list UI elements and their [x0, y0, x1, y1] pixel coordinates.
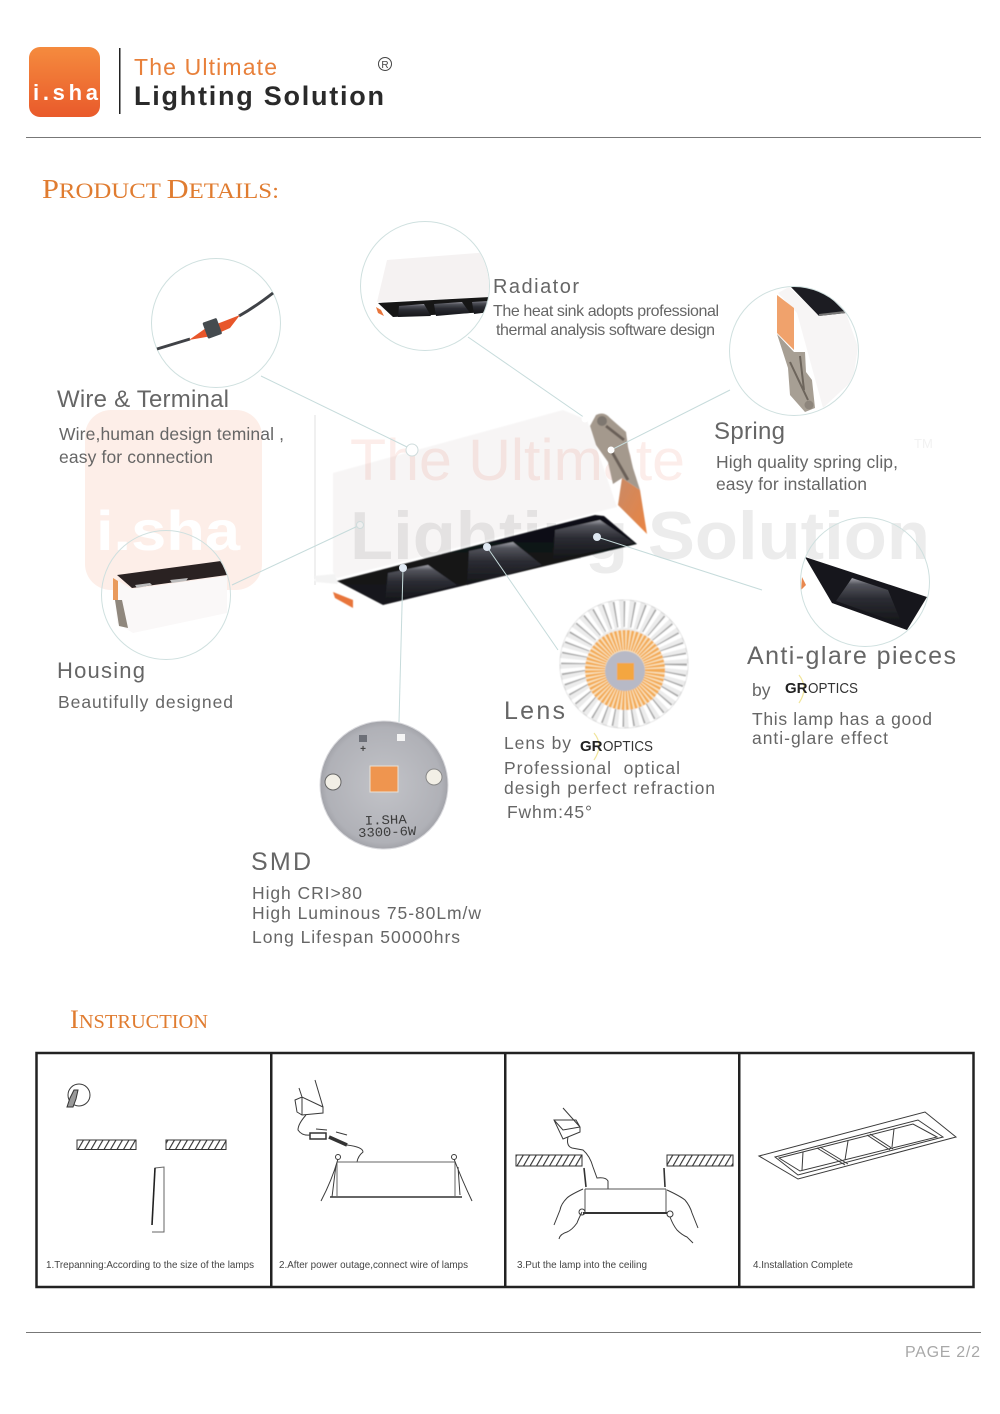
panel: lens: Lens by: [504, 733, 571, 753]
panel: lens: [504, 600, 715, 822]
panel: housing: [57, 530, 233, 712]
panel: spring: Spring: [714, 418, 785, 445]
panel: lens: desigh perfect refraction: [504, 778, 715, 798]
callout lines: [232, 337, 762, 722]
panel: SMD: [251, 721, 481, 947]
step 1: trepanning: [46, 1084, 254, 1271]
panel: anti-glare pieces: anti-glare effect: [752, 728, 888, 748]
step 3: place lamp: [516, 1108, 733, 1271]
panel: lens: Professional optical: [504, 758, 680, 778]
panel: SMD: SMD: [251, 848, 311, 876]
panel: housing: Housing: [57, 658, 145, 683]
panel: wire and terminal: [57, 258, 284, 467]
logo: GR Optics: OPTICS: [603, 738, 653, 755]
header logo: [29, 47, 100, 117]
panel: SMD: High Luminous 75-80Lm/w: [252, 903, 481, 923]
icon: radiator crop: [360, 222, 490, 350]
logo: GR Optics: GR: [580, 738, 603, 755]
step 1: trepanning: 1.Trepanning:According to the size of the lamps: [46, 1260, 254, 1271]
watermark logo: i.sha: [96, 499, 241, 562]
watermark slogan: The Ultimate: [350, 428, 685, 493]
watermark logo: [85, 410, 933, 590]
instruction table: [36, 1053, 974, 1287]
panel: radiator: thermal analysis software design: [496, 322, 715, 339]
icon: housing crop: [102, 530, 230, 660]
logo: GR Optics: GR: [785, 680, 808, 697]
logo: GR Optics: [580, 733, 653, 760]
footer page number: PAGE 2/2: [905, 1344, 980, 1361]
logo: GR Optics: OPTICS: [808, 680, 858, 697]
step 2: connect wire: [279, 1080, 472, 1271]
watermark logo: TM: [914, 436, 933, 451]
panel: anti-glare pieces: [747, 518, 956, 748]
panel: radiator: The heat sink adopts professional: [493, 303, 719, 320]
watermark slogan: Lighting Solution: [350, 498, 930, 574]
icon: LED board: I.SHA: [364, 812, 407, 829]
panel: radiator: Radiator: [493, 276, 579, 298]
panel: anti-glare pieces: by: [752, 680, 771, 700]
panel: spring: [714, 285, 898, 494]
heading: instruction: INSTRUCTION: [70, 1005, 208, 1034]
panel: spring: easy for installation: [716, 474, 867, 494]
icon: wire connector: [152, 258, 280, 388]
watermark slogan: [350, 428, 930, 574]
panel: SMD: Long Lifespan 50000hrs: [252, 927, 460, 947]
panel: wire and terminal: Wire & Terminal: [57, 386, 229, 413]
icon: LED board: +: [360, 744, 366, 755]
step 4: installed lamp: 4.Installation Complete: [753, 1260, 853, 1271]
header slogan: R: [381, 60, 389, 71]
panel: SMD: High CRI>80: [252, 883, 362, 903]
step 3: place lamp: 3.Put the lamp into the ceiling: [517, 1260, 647, 1271]
panel: wire and terminal: Wire,human design teminal ,: [59, 424, 284, 444]
panel: lens: Lens: [504, 697, 565, 725]
step 2: connect wire: 2.After power outage,connect wire of lamps: [279, 1260, 468, 1271]
panel: anti-glare pieces: Anti-glare pieces: [747, 642, 956, 670]
panel: lens: Fwhm:45°: [507, 802, 592, 822]
panel: radiator: [360, 222, 719, 350]
logo: GR Optics: [785, 675, 858, 703]
icon: lens: [560, 600, 688, 728]
step 4: installed lamp: [753, 1112, 956, 1271]
header slogan: The Ultimate: [134, 54, 277, 80]
header slogan: Lighting Solution: [134, 81, 384, 111]
header logo: i.sha: [33, 80, 99, 105]
header slogan: [119, 48, 392, 114]
icon: LED board: 3300-6W: [358, 824, 417, 841]
panel: spring: High quality spring clip,: [716, 452, 898, 472]
icon: spring crop: [730, 285, 858, 416]
icon: anti-glare crop: [800, 518, 930, 646]
panel: housing: Beautifully designed: [58, 692, 233, 712]
main lamp product: [313, 410, 930, 610]
icon: LED board: [320, 721, 448, 849]
panel: wire and terminal: easy for connection: [59, 447, 213, 467]
heading: product details: PRODUCT DETAILS:: [42, 174, 279, 204]
panel: anti-glare pieces: This lamp has a good: [752, 709, 932, 729]
